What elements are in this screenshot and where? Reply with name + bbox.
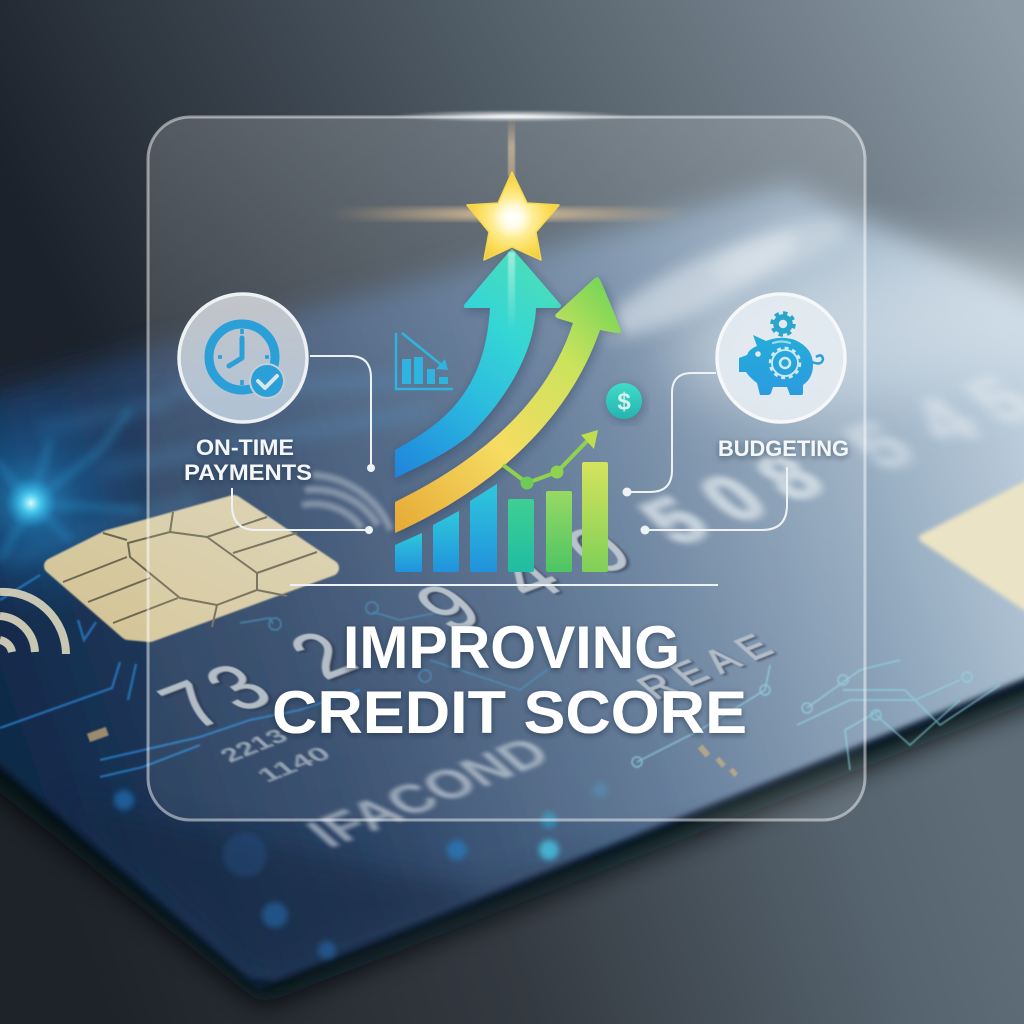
left connector lines — [232, 356, 375, 534]
label: on-time payments — [184, 435, 312, 485]
icon: dollar coin — [606, 383, 642, 419]
title: CREDIT SCORE — [272, 679, 747, 746]
card name right: REAE — [628, 628, 782, 706]
light flare — [330, 110, 690, 220]
label: budgeting: BUDGETING — [718, 436, 849, 461]
label: on-time payments: PAYMENTS — [184, 460, 312, 485]
small gold marks — [87, 727, 738, 777]
growth chart illustration — [395, 249, 621, 572]
label: on-time payments: ON-TIME — [196, 435, 294, 460]
card lower body — [0, 360, 1024, 980]
gold signature patch — [923, 478, 1024, 616]
card small digits: 2213 — [213, 724, 294, 767]
card right highlight — [662, 231, 1024, 429]
icon: star with glow — [467, 172, 559, 260]
piggy tail — [812, 355, 823, 363]
card name left: IFACOND — [296, 730, 563, 857]
icon: piggy bank with gears — [717, 294, 845, 422]
contactless symbol left — [0, 592, 66, 654]
arrow highlight — [508, 252, 515, 332]
piggy gear top — [772, 314, 794, 334]
chip contact lines — [63, 512, 317, 627]
piggy body — [739, 335, 813, 395]
card lower-front shade — [60, 800, 760, 975]
divider line — [290, 584, 718, 586]
glowing circuit dots — [114, 782, 608, 959]
card small digits line two: 1140 — [250, 742, 337, 787]
blue haze streaks — [10, 380, 430, 560]
glass panel — [148, 117, 865, 820]
card upper body, out of focus — [0, 185, 1024, 640]
card blue glow — [0, 380, 152, 620]
arrow: yellow green — [395, 277, 621, 533]
card number 508: 508 — [623, 440, 842, 558]
piggy coin slot — [773, 342, 790, 343]
card blurred top lettering — [591, 205, 853, 355]
panel top light edge — [190, 116, 824, 118]
title: IMPROVING — [343, 614, 680, 681]
card dark edge — [0, 600, 1024, 990]
icon: declining bar chart — [396, 333, 453, 389]
arrow: teal blue — [395, 249, 561, 478]
circuit traces centre — [240, 602, 560, 690]
card cast shadow — [0, 640, 1024, 1005]
contactless symbol centre — [302, 475, 391, 530]
trend line — [503, 430, 598, 490]
card number 732 940: 732940 — [141, 513, 650, 742]
title — [272, 614, 747, 746]
bars — [395, 462, 608, 572]
circuit traces left — [0, 575, 360, 777]
icon: dollar coin: $ — [617, 388, 631, 416]
piggy gear belly — [770, 348, 800, 378]
circuit traces right — [632, 660, 1000, 770]
icon: clock with check — [179, 294, 307, 422]
right connector lines — [622, 373, 787, 534]
EMV chip — [52, 503, 331, 634]
piggy eye — [755, 351, 761, 357]
